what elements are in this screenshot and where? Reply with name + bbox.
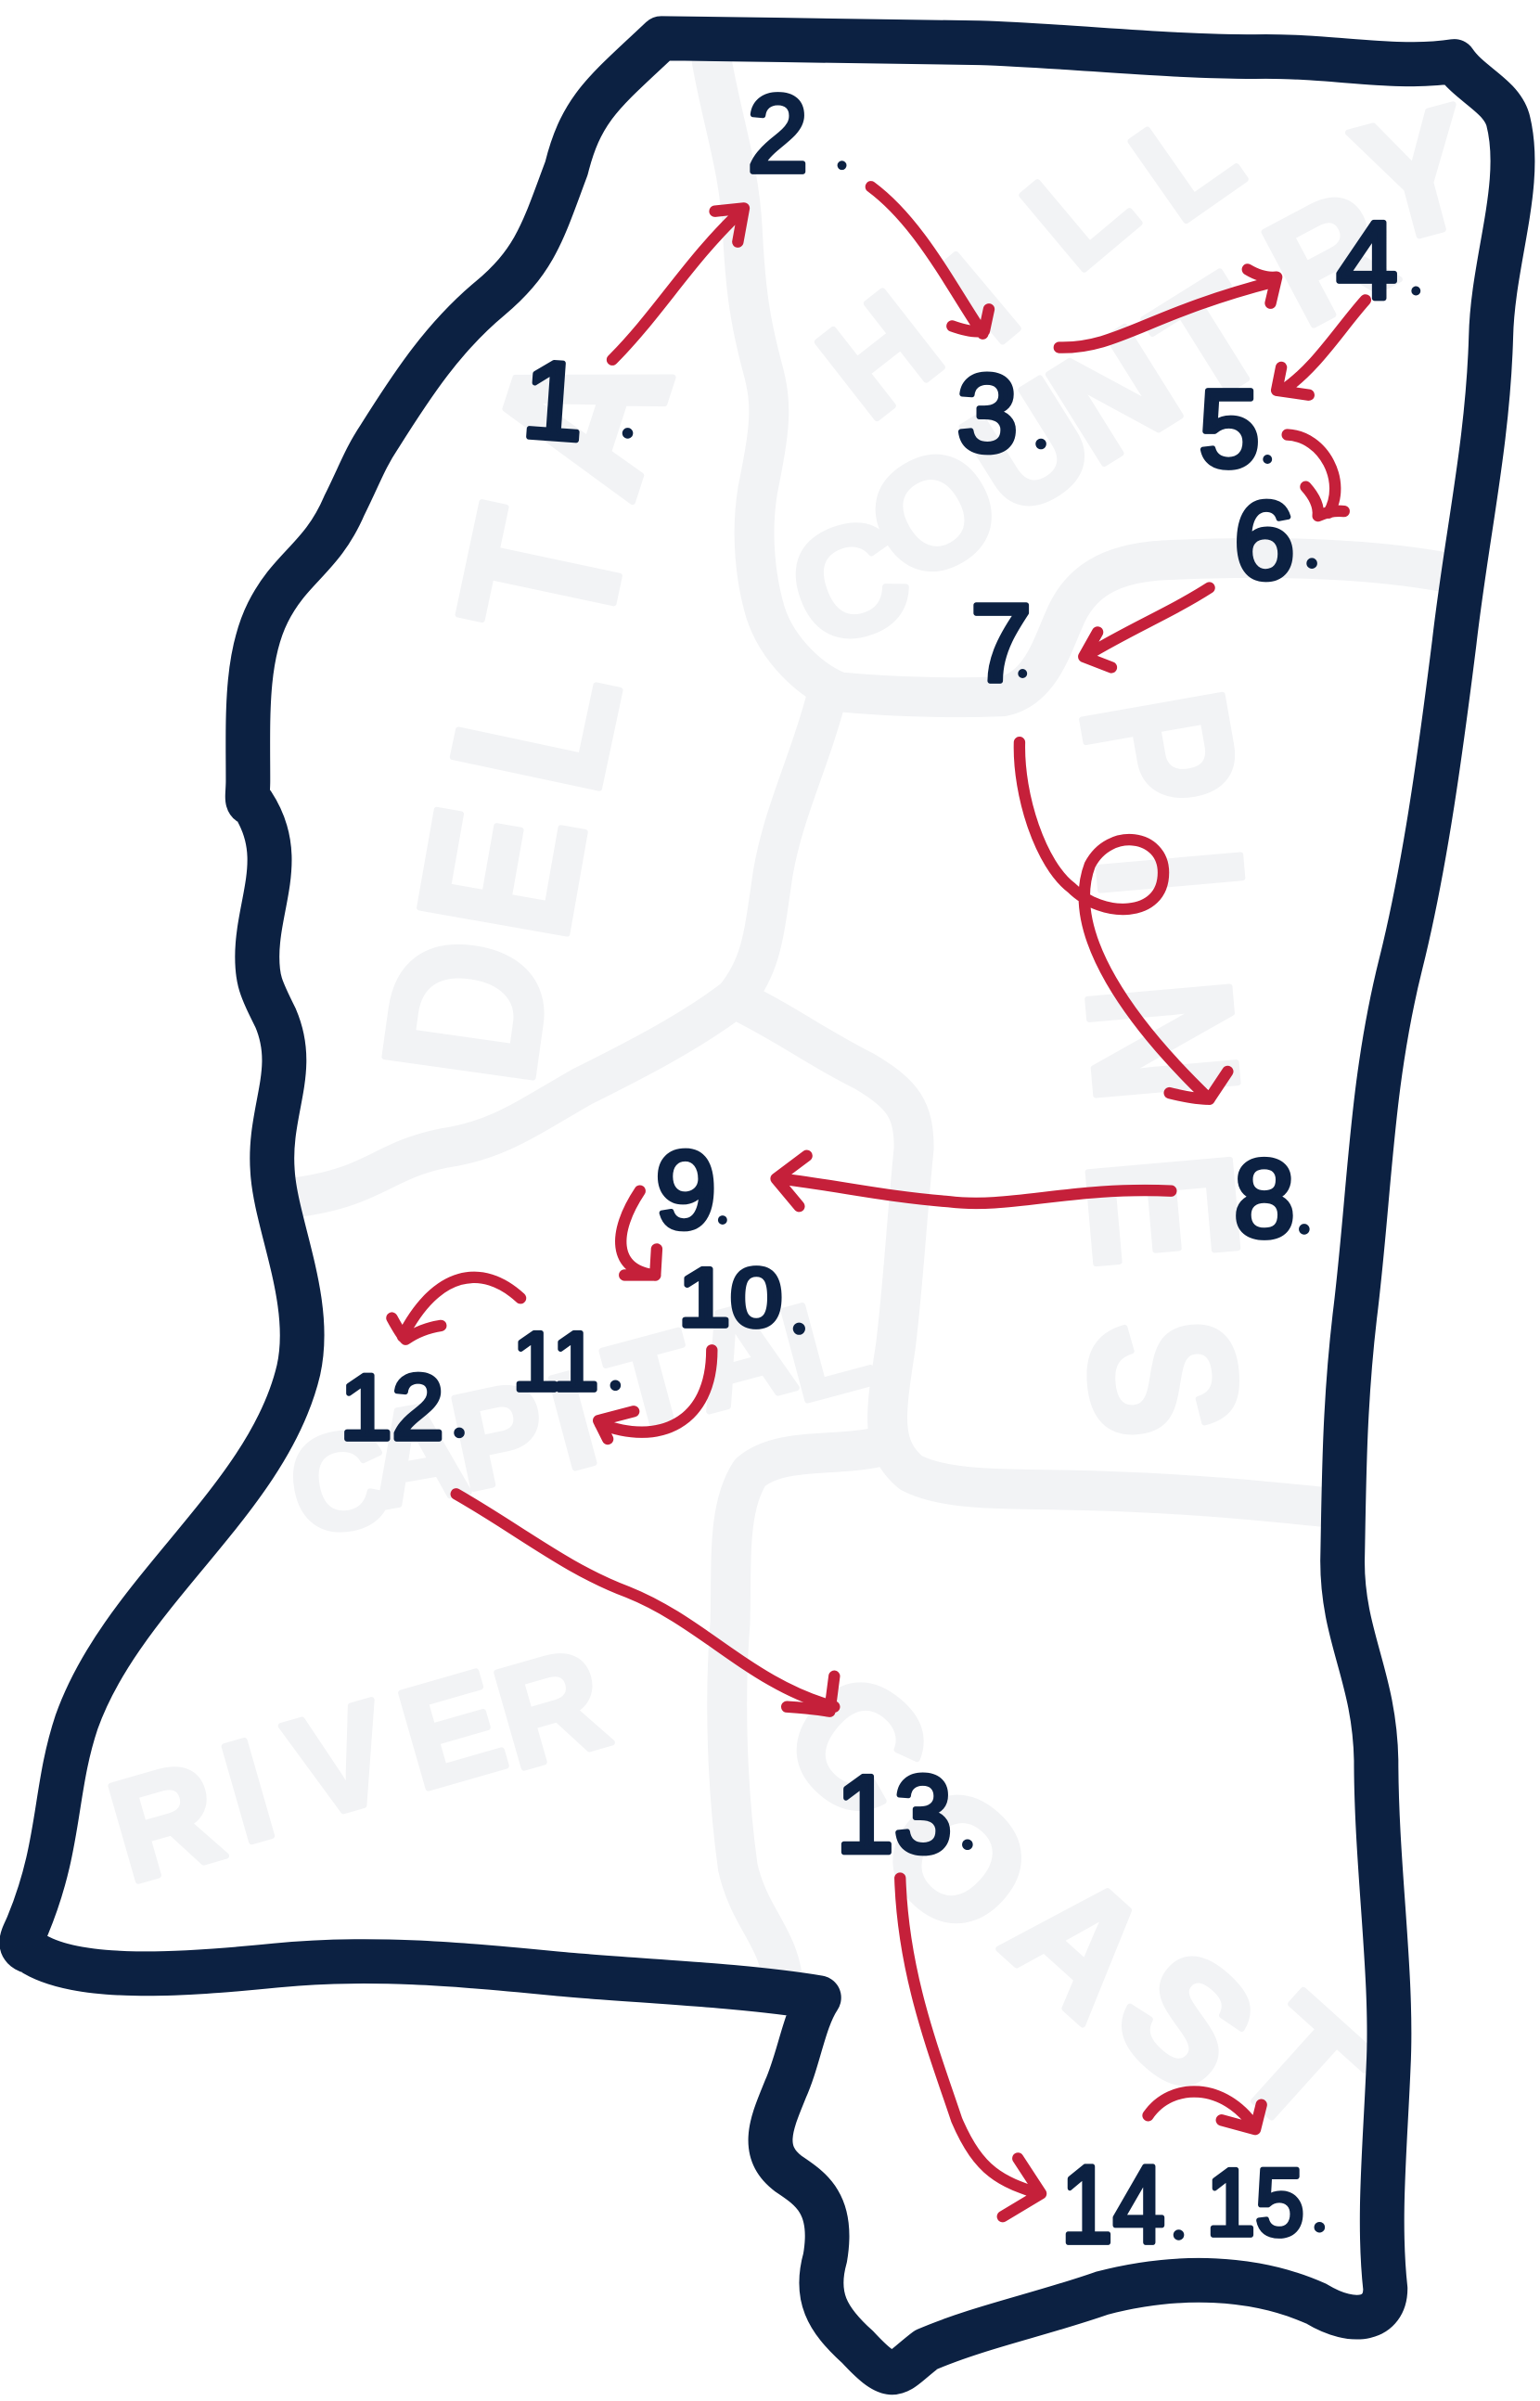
- arrow 4 to 5: [1277, 300, 1366, 395]
- region label: Pines: I: [1054, 840, 1289, 905]
- number 1: [519, 338, 633, 465]
- region label: River: V: [272, 1670, 408, 1851]
- region label: Coast: [751, 1634, 1402, 2171]
- number 1: 1: [519, 338, 588, 465]
- region label: Hill Country: L: [995, 123, 1162, 299]
- arrow 11 to 12: [391, 1278, 520, 1340]
- arrow 12 to 13: [456, 1494, 834, 1712]
- region label: Coast: O: [845, 1746, 1068, 1973]
- region label: Hill Country: I: [915, 225, 1046, 371]
- region label: Pines: E: [1044, 1144, 1284, 1275]
- number 2: [747, 72, 846, 196]
- number 5: 5: [1199, 367, 1260, 491]
- region label: Hill Country: C: [768, 482, 930, 681]
- region label: Hill Country: L: [1106, 73, 1266, 251]
- region label: Coast: T: [1200, 1962, 1402, 2171]
- number 13: 13: [836, 1753, 952, 1876]
- region label: Delta: D: [337, 923, 597, 1098]
- region label: River: [94, 1617, 623, 1913]
- region label: Capital: P: [440, 1353, 558, 1519]
- number 3: 3: [956, 353, 1018, 476]
- region label: River: E: [383, 1639, 520, 1820]
- arrow 7 to 8 with loop: [1020, 742, 1227, 1099]
- number 12: 12: [340, 1355, 444, 1458]
- region label: Hill Country: R: [1239, 156, 1418, 358]
- arrow 13 to 14: [900, 1879, 1041, 2216]
- region label: Pines: P: [1037, 675, 1284, 825]
- region label: Delta: [337, 312, 719, 1098]
- region label: Coast: C: [751, 1634, 964, 1855]
- region label: Capital: T: [593, 1303, 712, 1469]
- number 2: 2: [747, 72, 808, 196]
- arrow 2 to 3: [871, 186, 989, 334]
- region label: Hill Country: O: [840, 409, 1028, 617]
- region label: Hill Country: N: [1022, 293, 1207, 496]
- number 9: 9: [655, 1128, 716, 1252]
- arrow 8 to 9: [776, 1156, 1171, 1206]
- region label: River: I: [207, 1708, 289, 1874]
- region dividers: [299, 61, 1446, 1990]
- region label: Capital: I: [535, 1343, 610, 1498]
- region label: Delta: L: [404, 644, 667, 811]
- region label: Coast: S: [1082, 1913, 1290, 2128]
- region label: Delta: A: [444, 312, 719, 521]
- region label: Capital: A: [355, 1372, 478, 1536]
- region label: Capital: C: [279, 1399, 401, 1564]
- region label: Capital: A: [674, 1269, 807, 1440]
- arrow 1 to 2: [612, 208, 744, 360]
- region label: Coast: A: [971, 1834, 1187, 2054]
- region label: Hill Country: H: [792, 262, 969, 448]
- number 4: 4: [1336, 199, 1398, 323]
- number 15: 15: [1206, 2149, 1304, 2255]
- number 3: [956, 353, 1046, 476]
- region label: Pines: [1037, 675, 1289, 1446]
- region label: Delta: E: [372, 790, 633, 955]
- number 10: 10: [678, 1251, 782, 1343]
- region label: Pines: N: [1043, 971, 1284, 1111]
- region label: Hill Country: U: [937, 345, 1121, 548]
- arrow 14 to 15: [1149, 2092, 1262, 2129]
- arrow 5 to 6: [1288, 435, 1344, 516]
- region label: Hill Country: [768, 69, 1495, 681]
- number 11: 11: [513, 1315, 598, 1407]
- number 14: 14: [1060, 2143, 1165, 2266]
- number 7: 7: [970, 582, 1032, 705]
- arrow 9 to 10: [621, 1191, 657, 1275]
- region label: Pines: S: [1044, 1309, 1284, 1446]
- region label: Hill Country: Y: [1336, 69, 1495, 283]
- region label: River: R: [479, 1617, 623, 1800]
- arrow 6 to 7: [1084, 588, 1210, 667]
- number 6: 6: [1234, 480, 1295, 603]
- arrow 3 to 4: [1059, 269, 1277, 348]
- region label: Delta: T: [412, 491, 674, 658]
- region label: Capital: L: [767, 1264, 886, 1431]
- region label: Capital: [279, 1264, 886, 1564]
- number 8: 8: [1234, 1137, 1295, 1261]
- region label: Hill Country: T: [1124, 243, 1294, 437]
- arrow 10 to 11: [598, 1350, 712, 1439]
- region label: River: R: [94, 1730, 237, 1913]
